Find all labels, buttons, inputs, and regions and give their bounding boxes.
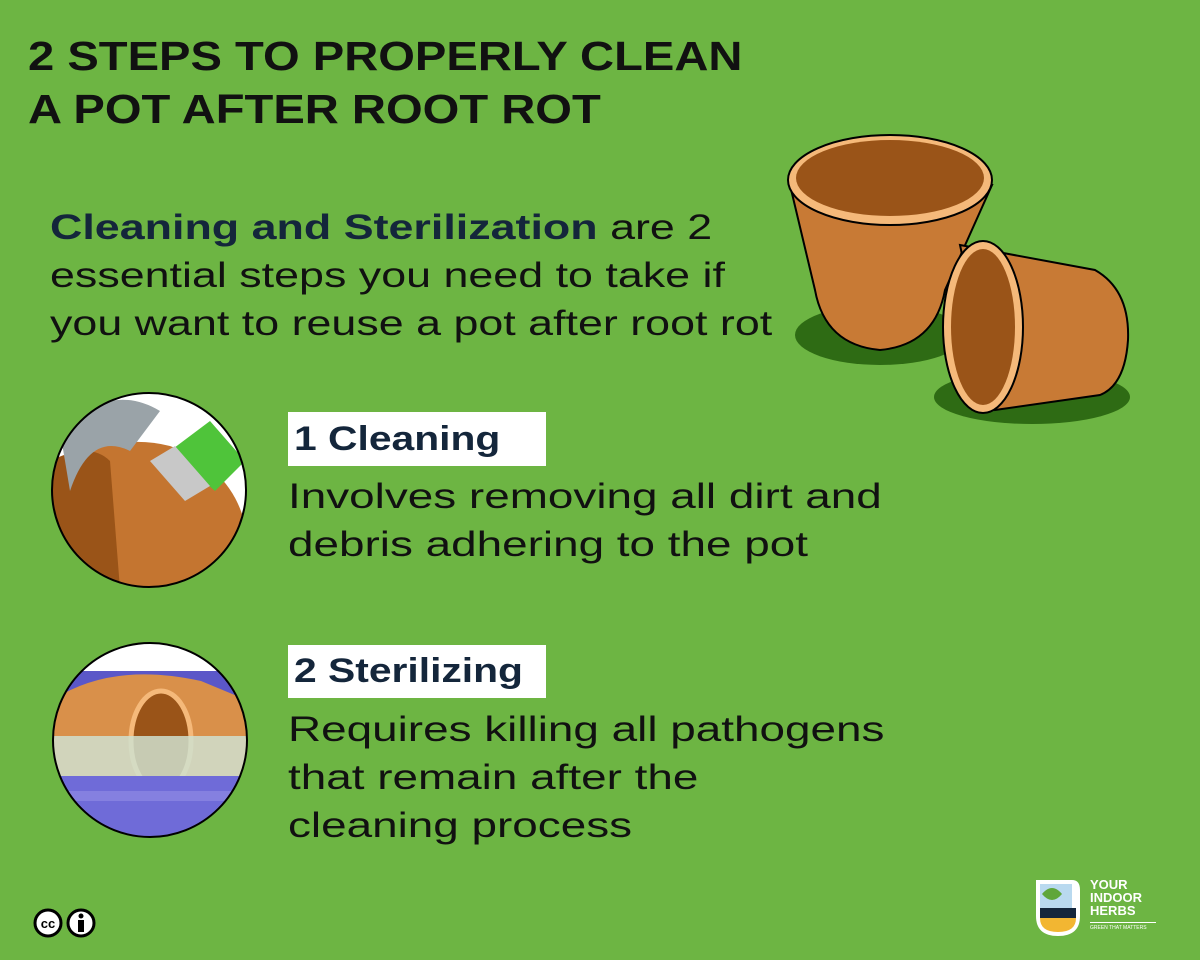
logo: GREEN THAT MATTERS: [1090, 925, 1147, 931]
icon: cleaning circle: [51, 392, 247, 588]
heading: 2 Sterilizing: [288, 645, 546, 698]
title: A POT AFTER ROOT ROT: [28, 86, 601, 132]
intro text: Cleaning and Sterilization are 2: [50, 208, 712, 247]
body: cleaning: [288, 477, 882, 564]
title: 2 STEPS TO PROPERLY CLEAN: [28, 33, 742, 79]
logo: HERBS: [1090, 903, 1136, 918]
title: [28, 33, 742, 132]
logo: INDOOR: [1090, 890, 1142, 905]
logo: [1036, 877, 1156, 936]
icon: sterilizing circle: [52, 642, 248, 838]
icon: creative commons: cc: [41, 916, 55, 931]
illustration: pots: [787, 134, 1130, 424]
heading: 1 Cleaning: 1 Cleaning: [294, 420, 500, 458]
heading: 1 Cleaning: [288, 412, 546, 466]
body: cleaning: Involves removing all dirt and: [288, 477, 882, 516]
body: sterilizing: that remain after the: [288, 758, 698, 797]
heading: 2 Sterilizing: 2 Sterilizing: [294, 652, 523, 690]
intro text: [50, 208, 772, 343]
icon: creative commons: [34, 908, 96, 938]
intro text: essential steps you need to take if: [50, 256, 725, 295]
body: sterilizing: Requires killing all pathogens: [288, 710, 884, 749]
body: sterilizing: cleaning process: [288, 806, 632, 845]
body: sterilizing: [288, 710, 884, 845]
body: cleaning: debris adhering to the pot: [288, 525, 808, 564]
logo: YOUR: [1090, 877, 1128, 892]
intro text: you want to reuse a pot after root rot: [50, 304, 772, 343]
